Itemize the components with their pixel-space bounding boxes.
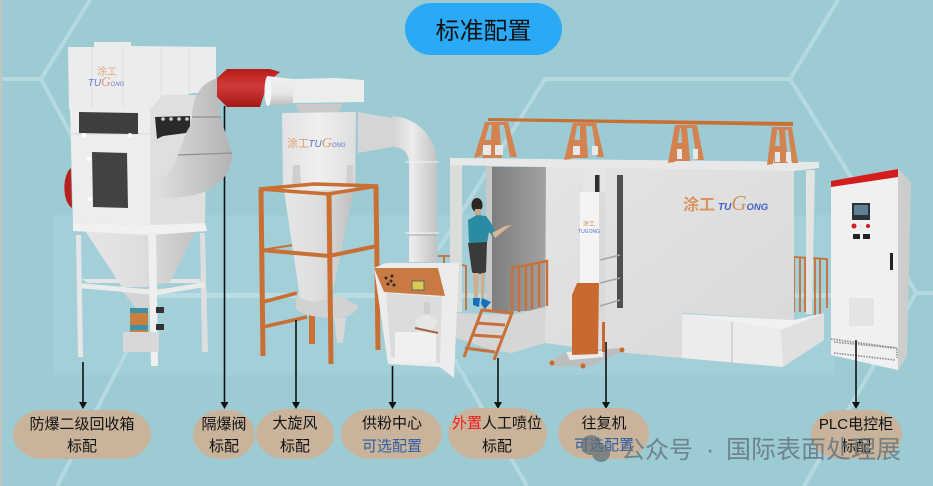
- cyclone bottom rim and outlet: [296, 296, 358, 318]
- equipment: PLC control cabinet: [831, 169, 911, 370]
- label: 供粉中心: [341, 409, 442, 459]
- label: 往复机: 可选配置: [574, 437, 634, 454]
- label: 防爆二级回收箱: [13, 410, 151, 459]
- booth right pillar: [806, 170, 815, 314]
- booth logo: 涂工: [683, 195, 715, 214]
- icon: watermark logo: [581, 435, 610, 462]
- arrow: 隔爆阀: [220, 402, 228, 409]
- equipment: spray booth: [438, 118, 827, 368]
- arrow: 供粉中心: [388, 366, 396, 409]
- collector duct: [158, 78, 232, 198]
- label: 大旋风: [256, 409, 334, 459]
- label: 防爆二级回收箱: 防爆二级回收箱: [29, 416, 135, 433]
- collector hopper: [82, 223, 200, 287]
- label: 大旋风: 大旋风: [272, 415, 318, 432]
- arrow: 大旋风: [292, 320, 300, 409]
- booth logo: TUGONG: [718, 191, 769, 215]
- title pill: 标准配置: [436, 18, 532, 45]
- arrow: 防爆二级回收箱: [79, 362, 87, 409]
- reciprocator: TUGONG: [578, 229, 600, 235]
- label: 防爆二级回收箱: 标配: [67, 438, 97, 455]
- cyclone logo: 涂工: [287, 136, 309, 150]
- booth main wall: [545, 166, 794, 358]
- booth top supports: [474, 122, 798, 165]
- collector black panel: [79, 112, 138, 134]
- collector red rear flange: [64, 168, 72, 208]
- booth wall slot: [617, 175, 623, 308]
- booth top rail: [488, 118, 793, 126]
- title pill: [405, 3, 562, 55]
- equipment: dust collector: [64, 42, 232, 366]
- label: 外置人工喷位: [448, 408, 547, 459]
- equipment: explosion isolation valve: [217, 69, 293, 107]
- collector front legs and bars: [78, 282, 205, 295]
- collector logo: TUGONG: [88, 74, 125, 89]
- cyclone back frame: [262, 245, 314, 343]
- reciprocator trolley: [552, 348, 622, 366]
- label: 外置人工喷位: 外置人工喷位: [452, 415, 542, 432]
- collector flange band: [73, 223, 207, 235]
- watermark: ·: [706, 436, 714, 464]
- label: 往复机: 往复机: [581, 414, 627, 432]
- label: 外置人工喷位: 标配: [482, 438, 512, 455]
- booth rear railings: [438, 256, 827, 315]
- arrow: 往复机: [602, 342, 610, 409]
- booth left pillars: [450, 160, 462, 312]
- cyclone cylinder: [282, 112, 356, 190]
- booth logo: [683, 191, 769, 215]
- reciprocator: [550, 167, 624, 368]
- booth support windows: [483, 145, 791, 162]
- booth step base: [456, 307, 545, 353]
- cyclone top drum: [293, 78, 364, 103]
- collector back legs: [200, 233, 208, 352]
- label: 隔爆阀: [193, 410, 255, 459]
- watermark: 公众号: [621, 437, 693, 464]
- collector top box: [68, 42, 216, 109]
- equipment: cyclone: [259, 78, 439, 364]
- watermark: [581, 435, 901, 464]
- person: [468, 198, 512, 309]
- label: 隔爆阀: 隔爆阀: [201, 416, 247, 433]
- cyclone logo: [287, 136, 346, 151]
- reciprocator: 涂工: [583, 220, 595, 228]
- leader line: 隔爆阀 behind equipment: [224, 106, 226, 405]
- cyclone orange frame: [259, 184, 378, 364]
- collector logo: [88, 65, 125, 89]
- arrow: 人工喷位: [494, 358, 502, 409]
- booth dark opening: [492, 167, 546, 311]
- booth front railing: [512, 261, 547, 313]
- equipment: powder supply center: [374, 263, 459, 378]
- cyclone cone: [284, 190, 354, 302]
- collector front face: [70, 109, 150, 225]
- label: 往复机: [558, 408, 649, 459]
- booth roof band: [450, 158, 819, 171]
- label: PLC电控柜: PLC电控柜: [819, 416, 893, 433]
- label: 供粉中心: 供粉中心: [362, 415, 422, 432]
- collector door: [92, 152, 128, 208]
- label: 供粉中心: 可选配置: [362, 438, 422, 455]
- collector logo: 涂工: [97, 65, 117, 78]
- label: 大旋风: 标配: [280, 438, 310, 455]
- booth lower cabinet: [682, 314, 783, 367]
- label: PLC电控柜: 标配: [841, 438, 871, 455]
- cyclone logo: TUGONG: [308, 136, 346, 151]
- collector pulse valves: [155, 116, 190, 139]
- cyclone outlet duct and elbow: [358, 112, 392, 153]
- label: 隔爆阀: 标配: [209, 438, 239, 455]
- booth stairs: [464, 310, 512, 360]
- watermark: 国际表面处理展: [726, 436, 901, 464]
- collector side face: [150, 95, 207, 225]
- arrow: PLC电控柜: [852, 340, 860, 409]
- collector rotary valve and bin: [130, 308, 148, 334]
- label: PLC电控柜: [811, 410, 902, 459]
